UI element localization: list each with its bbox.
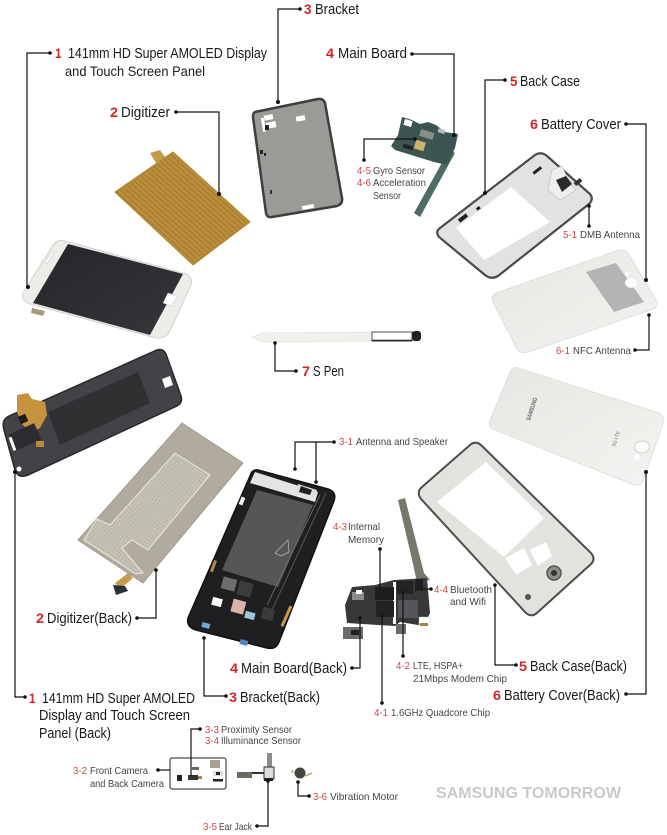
sublabel 3-5: Ear Jack: [219, 821, 253, 833]
leader 1 back: [13, 470, 27, 699]
leader 3-5: [255, 779, 270, 828]
heading 4 back: Main Board(Back): [241, 661, 347, 677]
part 3 back: black bracket: [188, 470, 335, 648]
sublabel 6-1: 6-1: [556, 345, 570, 357]
heading 7: S Pen: S Pen: [313, 364, 344, 380]
leader 3 back: [202, 636, 228, 698]
heading 1 back: 141mm HD Super AMOLED: [42, 691, 195, 707]
small parts: vibration motor: [292, 768, 312, 778]
leader 5: [483, 78, 507, 195]
sublabel 3-1: 3-1: [339, 436, 353, 448]
sublabels 4-5, 4-6: 4-5: [357, 165, 371, 177]
sublabels 3-3, 3-4: [205, 724, 301, 747]
heading 2 back: Digitizer(Back): [47, 611, 132, 627]
heading 1 back: 1: [29, 690, 36, 706]
sublabels 3-3, 3-4: Proximity Sensor: [221, 724, 292, 736]
heading 6: battery cover: 6: [530, 116, 538, 132]
heading 1: display: and Touch Screen Panel: [65, 63, 205, 79]
part 6 back: battery cover rear: [489, 368, 664, 485]
heading 1: display: [55, 45, 268, 79]
sublabels 3-3, 3-4: Illuminance Sensor: [221, 735, 301, 747]
heading 2: digitizer: Digitizer: [121, 105, 170, 121]
sublabel 6-1: NFC Antenna: [573, 345, 631, 357]
heading 1: display: 141mm HD Super AMOLED Display: [68, 46, 268, 62]
sublabel 3-5: 3-5: [203, 821, 217, 833]
heading 7: S Pen: 7: [302, 363, 310, 379]
leader 6 back: [624, 470, 648, 696]
sublabel 4-3: Internal: [348, 521, 380, 533]
leader 4-5: [362, 137, 417, 162]
heading 1 back: Display and Touch Screen: [39, 708, 190, 724]
leader 4-4: [420, 587, 433, 591]
sublabel 4-4: and Wifi: [450, 596, 486, 608]
leader 4: [410, 52, 456, 137]
leader 3-2: [156, 768, 170, 772]
leader 2: [174, 110, 221, 196]
heading 1: display: 1: [55, 45, 62, 61]
heading 5: back case: Back Case: [520, 74, 580, 90]
sublabel 4-3: Memory: [348, 534, 385, 546]
part 6: battery cover inner: [492, 250, 657, 353]
sublabel 4-2: [396, 660, 507, 685]
sublabel 4-1: 1.6GHz Quadcore Chip: [391, 707, 490, 719]
part 1: white front display: [23, 240, 191, 338]
sublabel 4-3: 4-3: [333, 521, 347, 533]
sublabels 4-5, 4-6: Sensor: [373, 190, 401, 202]
heading 3: bracket: [304, 1, 359, 18]
heading 5 back: 5: [519, 658, 527, 674]
sublabels 4-5, 4-6: Acceleration: [373, 177, 426, 189]
sublabel 4-3: [333, 521, 385, 546]
sublabel 3-2: 3-2: [73, 765, 87, 777]
heading 3: bracket: 3: [304, 1, 312, 17]
sublabels 3-3, 3-4: 3-3: [205, 724, 219, 736]
sublabel 4-1: 4-1: [374, 707, 388, 719]
leader 4-1: [380, 612, 384, 705]
leader 5-1: [587, 204, 591, 228]
heading 3 back: 3: [229, 689, 237, 705]
heading 3 back: Bracket(Back): [240, 690, 320, 706]
sublabel 4-4: Bluetooth: [450, 584, 492, 596]
sublabel 5-1: DMB Antenna: [580, 229, 640, 241]
heading 1 back: Panel (Back): [39, 726, 111, 742]
leader 4 back: [350, 616, 362, 670]
sublabel 4-4: [434, 584, 492, 608]
heading 2 back: 2: [36, 610, 44, 626]
sublabel 3-6: Vibration Motor: [330, 791, 398, 803]
part 1 back: black display: [3, 350, 181, 476]
heading 5: back case: 5: [510, 73, 518, 89]
leader 3-1: [293, 440, 336, 484]
sublabel 4-2: 4-2: [396, 660, 410, 672]
sublabel 3-2: [73, 765, 164, 790]
part 5: back case front: [437, 153, 592, 278]
small parts: ear jack: [237, 753, 274, 781]
heading 5 back: Back Case(Back): [530, 659, 627, 675]
leader 1: [26, 51, 52, 289]
sublabel 5-1: 5-1: [563, 229, 577, 241]
heading 4 back: 4: [230, 660, 238, 676]
leader 7: [273, 341, 298, 373]
heading 7: S Pen: [302, 363, 344, 380]
sublabels 4-5, 4-6: Gyro Sensor: [373, 165, 425, 177]
heading 4: main board: Main Board: [338, 46, 407, 62]
heading 6 back: Battery Cover(Back): [504, 688, 620, 704]
sublabels 4-5, 4-6: [357, 165, 426, 202]
part 2: gold digitizer: [115, 150, 250, 265]
small parts: camera box: [170, 758, 226, 789]
sublabel 4-4: 4-4: [434, 584, 448, 596]
leader 4-3: [378, 547, 382, 590]
brand: Samsung Tomorrow: SAMSUNG TOMORROW: [436, 785, 621, 802]
part 2 back: digitizer back: [78, 423, 243, 595]
leader 6-1: [633, 313, 651, 352]
sublabel 3-2: and Back Camera: [90, 778, 164, 790]
leader 3: [276, 7, 302, 104]
sublabel 4-2: 21Mbps Modem Chip: [413, 673, 507, 685]
part 5 back: back case rear: [419, 443, 594, 615]
heading 4: main board: 4: [326, 45, 334, 61]
heading 2: digitizer: 2: [110, 104, 118, 120]
heading 3: bracket: Bracket: [315, 2, 359, 18]
part 3: bracket: [253, 99, 342, 217]
leader 3-3: [191, 727, 202, 776]
heading 6 back: 6: [493, 687, 501, 703]
leader 3-6: [296, 780, 311, 798]
leader 2 back: [135, 568, 158, 620]
sublabel 3-5: [203, 821, 253, 833]
part 4 back: main board rear: [343, 498, 430, 639]
sublabel 4-2: LTE, HSPA+: [413, 660, 463, 672]
sublabels 4-5, 4-6: 4-6: [357, 177, 371, 189]
leader 6: [624, 122, 648, 282]
heading 6: battery cover: Battery Cover: [541, 117, 621, 133]
leader 4-2: [401, 590, 405, 658]
part 6 back: battery cover rear: SAMSUNG: [526, 397, 539, 422]
part 4: main board front: [391, 117, 458, 217]
leader 5 back: [493, 583, 518, 667]
sublabels 3-3, 3-4: 3-4: [205, 735, 219, 747]
heading 1 back: [29, 690, 195, 742]
part 6 back: battery cover rear: 3G LTE: [611, 430, 622, 448]
sublabel 3-2: Front Camera: [90, 765, 148, 777]
sublabel 3-1: Antenna and Speaker: [356, 436, 448, 448]
part 7: S Pen: [252, 331, 421, 342]
sublabel 3-6: 3-6: [313, 791, 327, 803]
